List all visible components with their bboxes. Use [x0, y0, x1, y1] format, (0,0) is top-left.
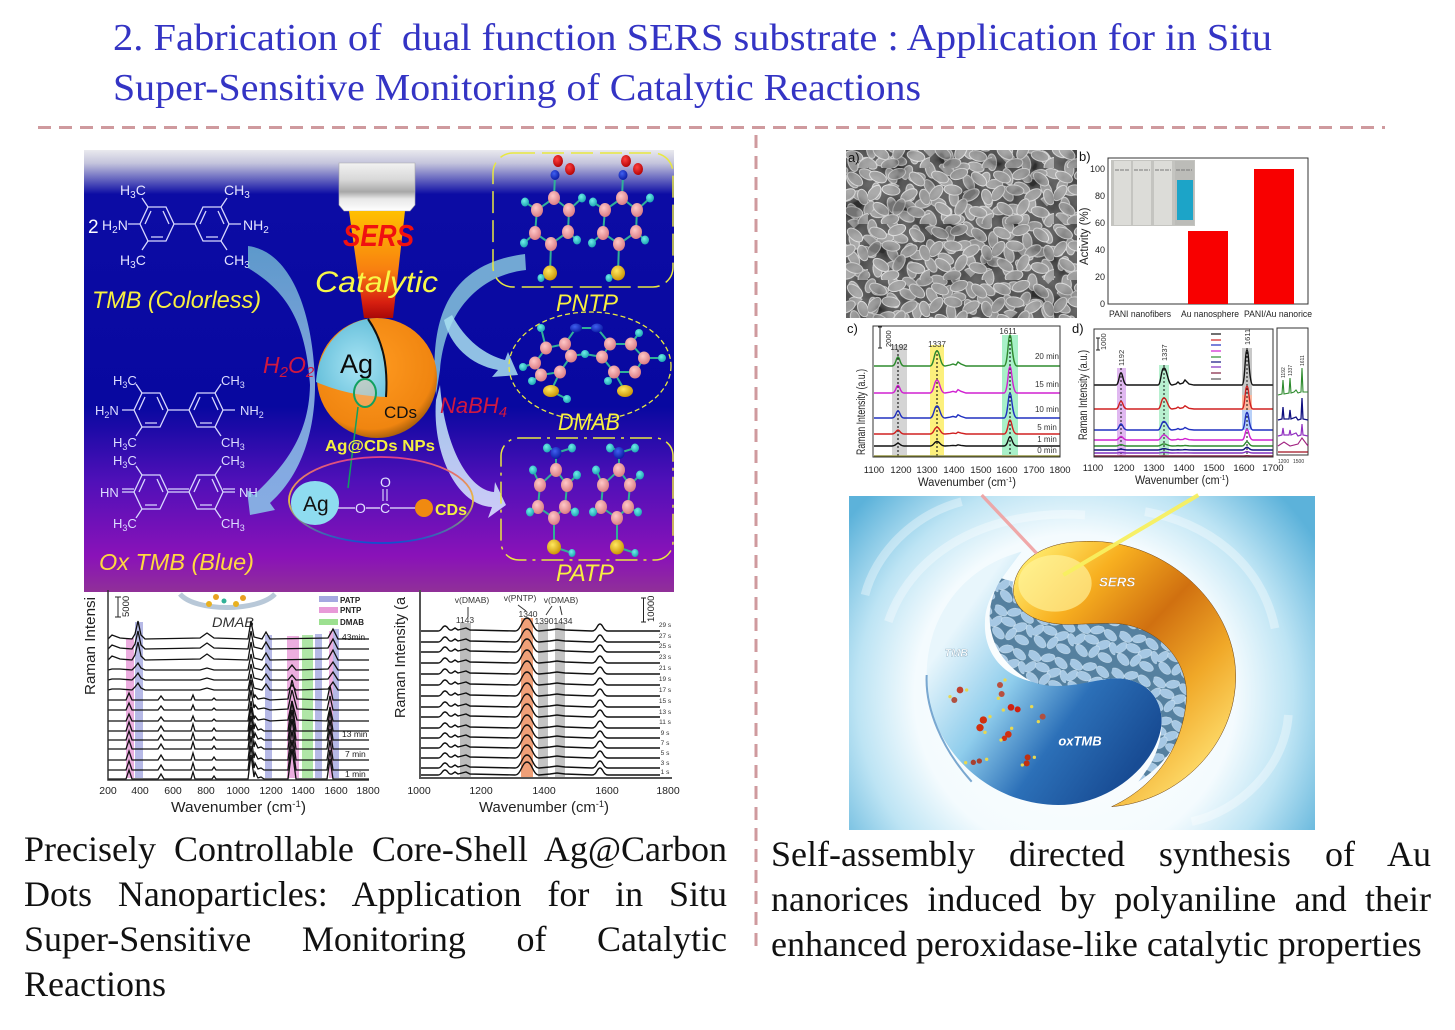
- panel d: Raman spectra vs concentration: 1300: [1143, 463, 1165, 474]
- label: H2O2: 2: [279, 364, 289, 381]
- labels: 1337: [1160, 344, 1169, 361]
- molecule: TMB colorless: C: [136, 252, 146, 268]
- molecule: TMB colorless: H: [102, 217, 112, 233]
- caption: left paper title: Precisely Controllable Core-Shell Ag@Carbon: [24, 829, 727, 869]
- axis tick labels: 1400: [291, 785, 315, 797]
- time labels: 5 s: [661, 750, 670, 757]
- axis tick labels: 1600: [595, 785, 619, 797]
- molecule: TMB colorless: C: [136, 182, 146, 198]
- time labels: 43min: [342, 632, 365, 642]
- y-axis title: Raman Intensi: [83, 597, 99, 695]
- molecule: TMB colorless: 3: [130, 190, 136, 201]
- peak annotations: 1434: [554, 616, 573, 626]
- ball: blue TMB half: [927, 552, 1162, 805]
- panel c: Raman spectra vs time: c): [847, 321, 858, 336]
- molecule: oxidised TMB: 3: [240, 460, 245, 470]
- molecule: oxidised TMB: CH: [221, 516, 240, 531]
- molecule: TMB colorless: 3: [244, 260, 250, 271]
- time labels: 1 min: [345, 769, 366, 779]
- axis tick labels: 1000: [407, 785, 431, 797]
- molecule: TMB: 3: [122, 380, 127, 390]
- axis tick labels: 600: [164, 785, 182, 797]
- inset spectra: 1192: [1281, 367, 1287, 378]
- label: H2O2: O: [288, 352, 306, 378]
- caption: left paper title: Reactions: [24, 964, 166, 1004]
- peak annotations: [455, 593, 578, 626]
- axis tick labels: 1200: [259, 785, 283, 797]
- axis tick labels: 1800: [356, 785, 380, 797]
- inset fragment: DMAB: [180, 594, 275, 630]
- panel c: Raman spectra vs time: 1600: [996, 465, 1018, 476]
- axis labels: [1079, 164, 1312, 319]
- axis labels: PANI nanofibers: [1109, 309, 1171, 319]
- x-axis title: -1: [596, 799, 604, 809]
- title: Super-Sensitive Monitoring of Catalytic Reactions: [113, 67, 921, 109]
- label: NaBH4: 4: [499, 404, 507, 421]
- label: PATP: PATP: [556, 560, 614, 587]
- molecule: oxidised TMB: CH: [221, 453, 240, 468]
- axis tick labels: 1200: [469, 785, 493, 797]
- axis tick labels: 800: [197, 785, 215, 797]
- axis labels: 0: [1100, 299, 1105, 309]
- panel c: Raman spectra vs time: -1: [1006, 477, 1012, 484]
- molecule: TMB colorless: N: [118, 217, 128, 233]
- panel c: Raman spectra vs time: 1200: [890, 465, 912, 476]
- time labels: 7 min: [345, 749, 366, 759]
- axis labels: PANI/Au nanorice: [1244, 309, 1312, 319]
- panel c: Raman spectra vs time: [847, 321, 1071, 489]
- axis labels: 100: [1090, 164, 1105, 174]
- highlight bands: [1117, 348, 1252, 455]
- molecule: TMB: H: [113, 373, 122, 388]
- panel d: Raman spectra vs concentration: Wavenumber (cm: [1135, 475, 1225, 487]
- label: SERS: SERS: [1099, 575, 1135, 590]
- laser rays: [982, 495, 1037, 553]
- scale bar: 10000: [646, 596, 657, 622]
- panel d: Raman spectra vs concentration: 1600: [1233, 463, 1255, 474]
- molecule: oxidised TMB: H: [113, 516, 122, 531]
- label: Ag@CDs NPs: Ag@CDs NPs: [325, 438, 435, 455]
- label: TMB colorless: TMB (Colorless): [92, 287, 261, 314]
- molecule: TMB: 3: [122, 442, 127, 452]
- arrow: TMB to Ox TMB: [247, 246, 315, 515]
- panel: DMAB: [509, 312, 671, 420]
- time labels: 3 s: [661, 760, 670, 767]
- panel c: Raman spectra vs time: 1800: [1049, 465, 1071, 476]
- traces: [1094, 350, 1273, 456]
- labels: 1192: [890, 343, 908, 352]
- axis tick labels: 1600: [324, 785, 348, 797]
- labels: 1337: [928, 340, 946, 349]
- molecule: oxidised TMB: C: [127, 453, 137, 468]
- molecule: TMB: 3: [240, 380, 245, 390]
- objective lens: [339, 163, 415, 211]
- peak annotations: 1340: [519, 609, 538, 619]
- diagram: Ag–O–C(=O)–CDs linkage: O: [355, 500, 366, 516]
- molecule: oxidised TMB: 3: [122, 460, 127, 470]
- inset fragment: DMAB: DMAB: [212, 614, 254, 630]
- molecule: TMB: 2: [259, 410, 264, 420]
- inset spectra: 1500: [1293, 459, 1304, 465]
- laser beam: [349, 211, 405, 318]
- scale bar: [115, 596, 132, 617]
- legend: PNTP: [340, 606, 362, 615]
- icon: core-shell sphere: Ag: [340, 349, 373, 379]
- panel d: Raman spectra vs concentration: 1500: [1203, 463, 1225, 474]
- labels: 15 min: [1035, 380, 1059, 389]
- axis labels: Activity (%): [1079, 207, 1091, 265]
- molecule: TMB colorless: 2: [112, 225, 118, 236]
- labels: 0 min: [1037, 446, 1057, 455]
- swirl streaks: [865, 502, 1288, 822]
- time labels: 17 s: [659, 687, 672, 694]
- panel c: Raman spectra vs time: Raman Intensity (a.u.): [856, 369, 868, 455]
- label: PNTP: PNTP: [556, 290, 618, 317]
- axis labels: Au nanosphere: [1181, 309, 1239, 319]
- molecule: TMB colorless: H: [120, 252, 130, 268]
- labels: 1 min: [1037, 435, 1057, 444]
- bar: PANI/Au nanorice: [1254, 169, 1294, 304]
- inset spectra: 1337: [1288, 365, 1294, 376]
- y-axis title: Raman Intensity (a: [393, 596, 409, 718]
- molecule: oxidised TMB: HN: [100, 485, 119, 500]
- label: SERS: SERS: [343, 218, 414, 253]
- x-axis title: ): [604, 800, 609, 816]
- molecule: oxidised TMB: NH: [239, 485, 258, 500]
- labels: [1099, 329, 1252, 366]
- highlight bands: [460, 618, 565, 778]
- scale bar: 5000: [121, 596, 132, 617]
- peak annotations: 1143: [456, 615, 474, 625]
- scale bar: [641, 596, 657, 622]
- panel a: SEM of nanorice: a): [848, 150, 860, 165]
- inset: cuvette photo: [1111, 160, 1195, 226]
- panel c: Raman spectra vs time: Wavenumber (cm: [918, 477, 1008, 489]
- molecule: oxidised TMB: H: [113, 453, 122, 468]
- peak annotations: v(DMAB): [455, 595, 489, 605]
- time labels: 25 s: [659, 643, 672, 650]
- label: H2O2: 2: [305, 364, 315, 381]
- icon: core-shell sphere: [316, 318, 437, 488]
- panel c: Raman spectra vs time: 1300: [916, 465, 938, 476]
- label: NaBH4: NaBH: [440, 393, 499, 418]
- diagram: Ag–O–C(=O)–CDs linkage: C: [380, 500, 390, 516]
- molecule: TMB colorless: 2: [88, 217, 99, 238]
- legend: PATP: [340, 596, 361, 605]
- panel: PATP: [501, 438, 673, 560]
- labels: 20 min: [1035, 352, 1059, 361]
- molecule: TMB colorless: H: [120, 182, 130, 198]
- label: oxTMB: oxTMB: [1058, 734, 1102, 749]
- legend: [319, 596, 364, 627]
- molecule: TMB: N: [109, 403, 119, 418]
- caption: left paper title: Dots Nanoparticles: Application for in Situ: [24, 874, 727, 914]
- panel: PNTP: [493, 153, 673, 287]
- icon: core-shell sphere: CDs: [384, 403, 417, 422]
- axis tick labels: [99, 785, 380, 797]
- arrow: to DMAB: [444, 315, 518, 377]
- x-axis title: Wavenumber (cm: [171, 800, 285, 816]
- caption: left paper title: Super-Sensitive Monitoring of Catalytic: [24, 919, 727, 959]
- panel c: Raman spectra vs time: 1100: [864, 465, 884, 476]
- label: Catalytic: Catalytic: [315, 266, 438, 299]
- molecule: TMB: CH: [221, 373, 240, 388]
- labels: [890, 327, 1059, 455]
- panel d: Raman spectra vs concentration: 1100: [1083, 463, 1103, 474]
- time labels: 13 min: [342, 729, 368, 739]
- molecule: oxidised TMB: C: [127, 516, 137, 531]
- inset spectra: 1200: [1278, 459, 1289, 465]
- chart: time-resolved Raman spectra, left: [83, 590, 380, 816]
- axis tick labels: 1400: [532, 785, 556, 797]
- panel d: Raman spectra vs concentration: Raman Intensity (a.u.): [1078, 350, 1090, 440]
- axis labels: 40: [1095, 245, 1105, 255]
- molecule: TMB: C: [127, 435, 137, 450]
- panel d: Raman spectra vs concentration: -1: [1220, 475, 1225, 482]
- molecule: TMB colorless: 3: [244, 190, 250, 201]
- panel c: Raman spectra vs time: 2000: [884, 330, 893, 347]
- molecule: TMB: C: [127, 373, 137, 388]
- diagram: Ag–O–C(=O)–CDs linkage: [289, 457, 473, 543]
- axis tick labels: 1800: [656, 785, 680, 797]
- diagram: Ag–O–C(=O)–CDs linkage: O: [380, 474, 391, 490]
- panel d: Raman spectra vs concentration: 1200: [1113, 463, 1135, 474]
- panel d: Raman spectra vs concentration: [1072, 321, 1308, 487]
- title: [113, 17, 1272, 109]
- label: H2O2: H: [263, 352, 280, 378]
- axis labels: 60: [1095, 218, 1105, 228]
- labels: 1000: [1099, 333, 1108, 350]
- peak annotations: v(DMAB): [544, 595, 578, 605]
- panel c: Raman spectra vs time: 1500: [970, 465, 992, 476]
- panel b: activity bar chart: [1079, 149, 1312, 319]
- diagram: Ag–O–C(=O)–CDs linkage: Ag: [303, 493, 329, 516]
- peak annotations: v(PNTP): [504, 593, 536, 603]
- molecule: TMB: [95, 373, 264, 452]
- time labels: [659, 622, 672, 776]
- molecule: oxidised TMB: [100, 453, 258, 533]
- time labels: 1 s: [661, 769, 670, 776]
- diagram: Ag–O–C(=O)–CDs linkage: CDs: [435, 502, 467, 519]
- caption: right paper title: enhanced peroxidase-like catalytic properties: [771, 924, 1422, 964]
- caption: right paper title: nanorices induced by polyaniline and their: [771, 879, 1431, 919]
- labels: 1611: [1243, 329, 1252, 345]
- panel c: Raman spectra vs time: 1400: [943, 465, 965, 476]
- molecule: TMB: 3: [240, 442, 245, 452]
- molecule: oxidised TMB: 3: [240, 523, 245, 533]
- axis tick labels: [407, 785, 680, 797]
- molecule: TMB colorless: [88, 182, 269, 271]
- spectra traces: [420, 618, 660, 775]
- inset spectra: 1611: [1300, 355, 1306, 366]
- ball: gold SERS half: [1013, 541, 1236, 807]
- traces: [874, 335, 1060, 456]
- labels: 5 min: [1037, 423, 1057, 432]
- panel a: SEM of nanorice: [846, 150, 1077, 318]
- label: TMB: TMB: [944, 647, 968, 659]
- time labels: [342, 632, 368, 779]
- inset spectra: [1277, 328, 1308, 465]
- legend: DMAB: [340, 618, 364, 627]
- axis tick labels: 200: [99, 785, 117, 797]
- labels: 1192: [1117, 350, 1126, 366]
- chart: time-resolved Raman spectra, right: [393, 590, 680, 816]
- molecule: TMB: H: [113, 435, 122, 450]
- panel d: Raman spectra vs concentration: 1700: [1262, 463, 1284, 474]
- caption: left paper title: [24, 829, 727, 1004]
- label: DMAB: DMAB: [558, 409, 620, 436]
- label: Ox TMB: Ox TMB (Blue): [99, 549, 254, 575]
- panel d: Raman spectra vs concentration: 1400: [1173, 463, 1195, 474]
- x-axis title: Wavenumber (cm: [479, 800, 593, 816]
- molecule: TMB colorless: NH: [243, 217, 263, 233]
- molecule: TMB colorless: 3: [130, 260, 136, 271]
- axis tick labels: 1000: [226, 785, 250, 797]
- time labels: 9 s: [661, 730, 670, 737]
- highlight bands: [892, 335, 1018, 455]
- legend: [1211, 334, 1221, 379]
- arrow: to PNTP: [435, 254, 526, 395]
- time labels: 11 s: [659, 719, 672, 726]
- time labels: 7 s: [661, 740, 670, 747]
- caption: right paper title: Self-assembly directed synthesis of Au: [771, 834, 1431, 874]
- molecule: TMB colorless: CH: [224, 182, 244, 198]
- axis tick labels: 400: [131, 785, 149, 797]
- time labels: 23 s: [659, 654, 672, 661]
- axis labels: 80: [1095, 191, 1105, 201]
- labels: 1611: [999, 327, 1017, 336]
- arrow: to PATP: [436, 385, 506, 518]
- time labels: 27 s: [659, 633, 672, 640]
- spectra traces: [108, 621, 369, 779]
- x-axis title: ): [301, 800, 306, 816]
- time labels: 19 s: [659, 676, 672, 683]
- molecule: TMB: NH: [240, 403, 259, 418]
- panel d: Raman spectra vs concentration: ): [1225, 475, 1229, 487]
- molecule: TMB: H: [95, 403, 104, 418]
- title: 2. Fabrication of dual function SERS substrate : Application for in Situ: [113, 17, 1272, 59]
- time labels: 21 s: [659, 665, 672, 672]
- panel: Ag@CDs catalytic schematic: [84, 150, 674, 592]
- molecule: TMB: 2: [104, 410, 109, 420]
- x-axis title: -1: [292, 799, 301, 809]
- caption: right paper title: [771, 834, 1431, 964]
- molecule: TMB colorless: CH: [224, 252, 244, 268]
- illustration: SERS yin-yang nanorice artwork: [849, 495, 1315, 830]
- panel c: Raman spectra vs time: ): [1012, 477, 1016, 489]
- nanorice band: [990, 578, 1186, 782]
- molecule: oxidised TMB: 3: [122, 523, 127, 533]
- axis labels: 20: [1095, 272, 1105, 282]
- water molecules: [948, 678, 1046, 767]
- labels: 10 min: [1035, 405, 1059, 414]
- panel d: Raman spectra vs concentration: d): [1072, 321, 1084, 336]
- highlight bands: [126, 622, 339, 778]
- time labels: 15 s: [659, 698, 672, 705]
- peak annotations: 1390: [535, 616, 554, 626]
- panel c: Raman spectra vs time: 1700: [1023, 465, 1045, 476]
- time labels: 13 s: [659, 709, 672, 716]
- panel b: activity bar chart: b): [1079, 149, 1091, 164]
- bar: Au nanosphere: [1188, 231, 1228, 304]
- molecule: TMB: CH: [221, 435, 240, 450]
- molecule: TMB colorless: 2: [263, 225, 269, 236]
- time labels: 29 s: [659, 622, 672, 629]
